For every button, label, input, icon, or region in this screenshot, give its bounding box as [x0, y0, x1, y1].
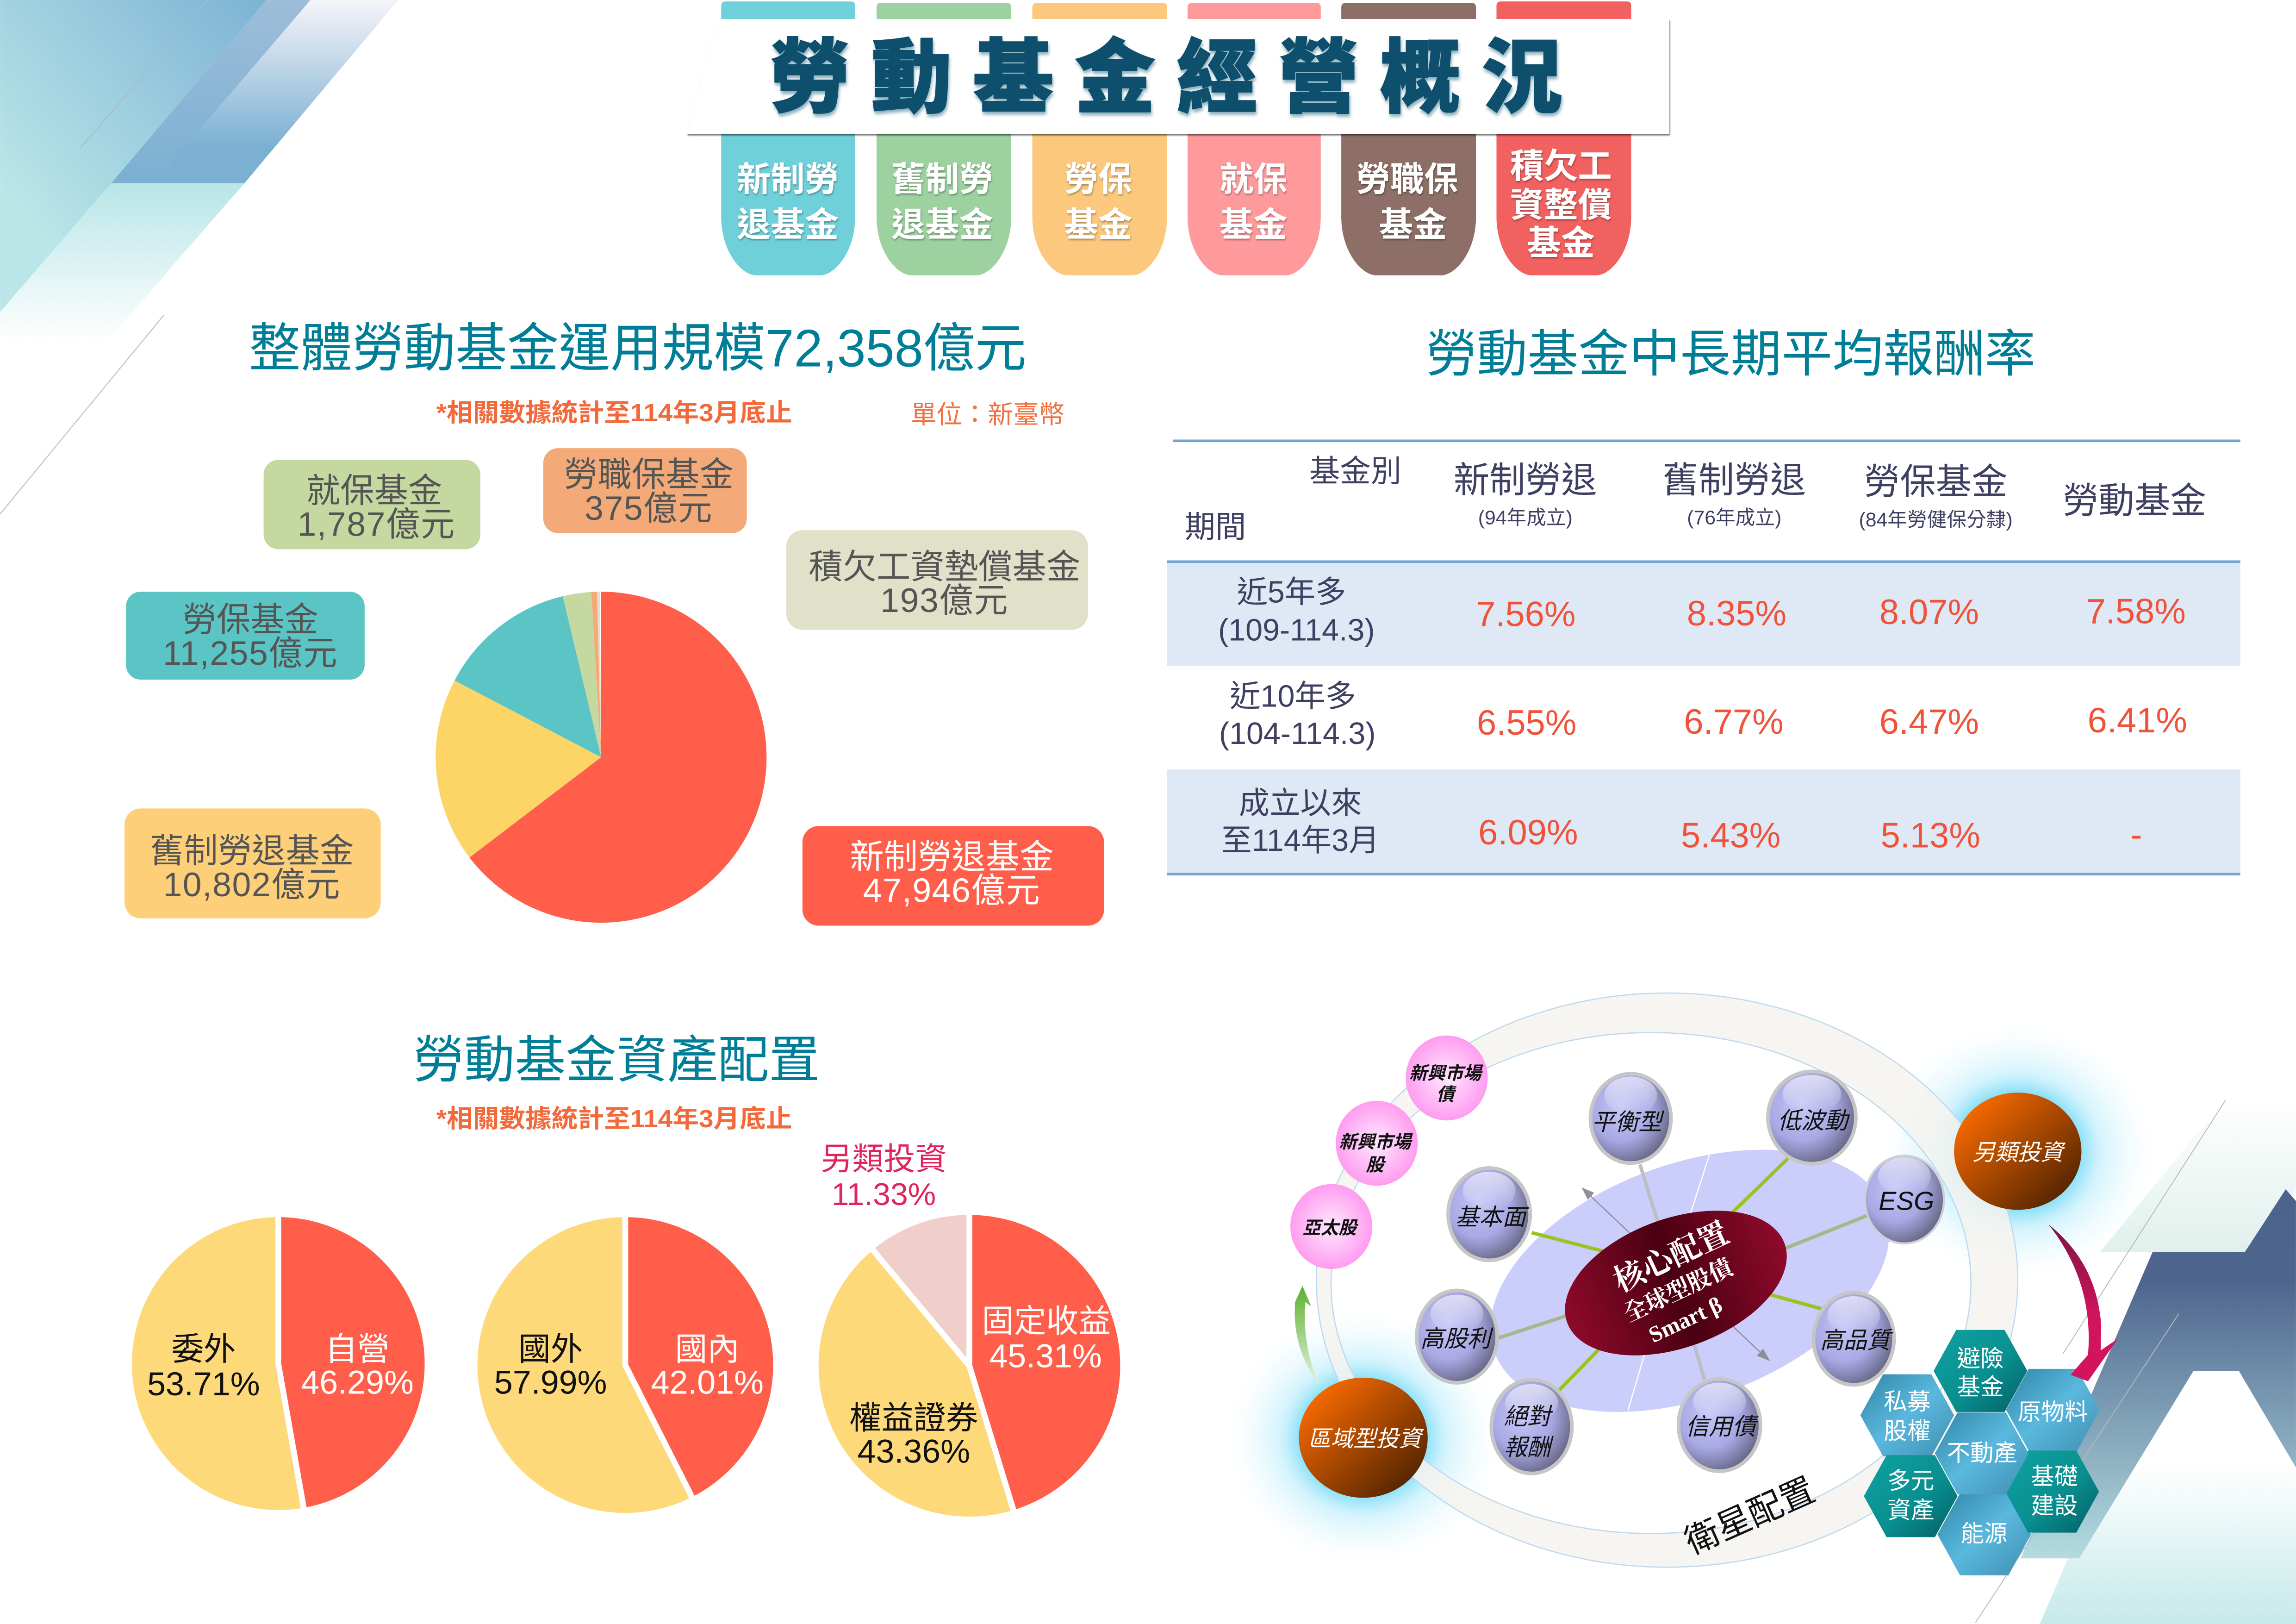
- fund tab: 新制勞退基金: [721, 132, 855, 275]
- hex: 原物料: 原物料: [2018, 1399, 2088, 1425]
- table row: 近10年多: (104-114.3): [1219, 717, 1375, 751]
- sphere: 信用債: 信用債: [1686, 1413, 1759, 1440]
- background: bottom-right corner geometry: [1975, 1099, 2296, 1624]
- hex: 能源: 能源: [1960, 1520, 2008, 1547]
- table row: 近10年多: [1219, 679, 2187, 751]
- note: currency unit: 單位：新臺幣: [911, 400, 1064, 429]
- table row: 近5年多: 8.35%: [1687, 594, 1786, 633]
- pie chart: 固定收益, 權益證券, 另類投資: 另類投資: [821, 1142, 946, 1177]
- hex: 多元資產: 多元: [1887, 1468, 1934, 1494]
- fund tab: 新制勞退基金: 退基金: [737, 206, 839, 244]
- callout: 舊制勞退基金: [124, 808, 381, 918]
- fund tab: 勞職保基金: 勞職保: [1356, 161, 1458, 199]
- hex: 避險基金: 避險: [1957, 1345, 2004, 1372]
- sphere: 絕對報酬: 報酬: [1504, 1434, 1554, 1460]
- pie chart: 國外 vs 國內: 42.01%: [651, 1364, 764, 1401]
- spokes: [1496, 1155, 1867, 1411]
- callout: 新制勞退基金: 新制勞退基金: [850, 838, 1054, 876]
- table row: 近5年多: [1218, 575, 2186, 648]
- satellite ring: [1316, 993, 2018, 1567]
- arrow: green upward: [1293, 1286, 1319, 1386]
- fund tab: 舊制勞退基金: 退基金: [891, 206, 993, 244]
- callout: 就保基金: 1,787億元: [297, 506, 455, 543]
- pie chart: 委外 vs 自營: 自營: [325, 1331, 390, 1367]
- pink bubble: 新興市場股: 新興市場: [1339, 1132, 1413, 1152]
- pie chart: 委外 vs 自營: [132, 1214, 425, 1513]
- core disk: [1454, 1099, 1925, 1462]
- sphere: 基本面: 基本面: [1456, 1204, 1529, 1230]
- fund tab: 勞職保基金: [1341, 132, 1476, 275]
- pink bubble: 新興市場股: 股: [1366, 1155, 1386, 1175]
- note: asset allocation data date: *相關數據統計至114年3月底止: [436, 1105, 792, 1133]
- pie chart: 固定收益, 權益證券, 另類投資: 11.33%: [832, 1177, 936, 1212]
- table row: 成立以來: -: [2130, 815, 2142, 855]
- pink bubble: 亞太股: 亞太股: [1302, 1218, 1358, 1238]
- callout: 勞保基金: [126, 592, 365, 680]
- pie chart: 國外 vs 國內: 國內: [675, 1331, 740, 1367]
- callout: 勞保基金: 11,255億元: [163, 634, 338, 672]
- callout: 積欠工資墊償基金: 積欠工資墊償基金: [809, 548, 1080, 586]
- thin arrows: [1583, 1188, 1769, 1360]
- diagram: core-satellite allocation: [1229, 993, 2153, 1575]
- glow: behind 區域型投資: [1229, 1312, 1498, 1564]
- orange sphere: 區域型投資: [1299, 1378, 1428, 1498]
- table header: 勞保基金: [1864, 462, 2008, 502]
- callout: 新制勞退基金: 47,946億元: [863, 872, 1040, 910]
- title banner: [687, 1, 1669, 275]
- callout: 積欠工資墊償基金: 193億元: [880, 581, 1008, 619]
- table row: 近5年多: 近5年多: [1237, 575, 1346, 610]
- table row: 近10年多: 6.47%: [1879, 702, 1979, 742]
- hex: 私募股權: 私募: [1884, 1388, 1931, 1415]
- pie chart: 國外 vs 國內: [477, 1214, 773, 1513]
- table row: 成立以來: [1221, 786, 2142, 858]
- main title: 勞動基金經營概況: [770, 32, 1562, 123]
- sphere: 高品質: [1813, 1293, 1894, 1385]
- fund tab: 就保基金: [1188, 132, 1321, 275]
- callout: 勞保基金: 勞保基金: [182, 600, 318, 638]
- pie chart: total fund size: [518, 675, 684, 840]
- table header: 新制勞退: [1454, 461, 1597, 500]
- callout: 勞職保基金: 勞職保基金: [564, 456, 734, 493]
- pink bubble: 新興市場債: 債: [1436, 1085, 1456, 1105]
- arrow: magenta curved down: [2048, 1224, 2118, 1381]
- background: top-left corner geometry: [0, 0, 398, 514]
- table header: 勞動基金: [2063, 481, 2206, 521]
- sphere: 平衡型: 平衡型: [1592, 1109, 1664, 1135]
- hex: 基礎建設: 基礎: [2031, 1463, 2078, 1490]
- pink bubble: 新興市場債: [1406, 1036, 1487, 1120]
- sphere: 高股利: [1417, 1291, 1497, 1383]
- label: 衛星配置: 衛星配置: [1679, 1470, 1821, 1562]
- table row: 成立以來: 5.13%: [1881, 816, 1980, 855]
- core ellipse: [1545, 1183, 1807, 1383]
- table header: 期間: [1185, 510, 1246, 544]
- fund tab: 勞保基金: [1033, 132, 1167, 275]
- sphere: 高股利: 高股利: [1420, 1325, 1493, 1352]
- callout: 勞職保基金: [543, 448, 747, 533]
- heading: long-term average return: 勞動基金中長期平均報酬率: [1426, 326, 2035, 383]
- sphere: 低波動: [1768, 1071, 1856, 1164]
- core ellipse: 核心配置: [1609, 1216, 1734, 1299]
- sphere: 平衡型: [1591, 1074, 1671, 1163]
- orange sphere: 另類投資: [1954, 1093, 2081, 1210]
- table header: 基金別: [1309, 455, 1401, 489]
- hexagon cluster: alternative assets: [1860, 1330, 2100, 1575]
- hex: 私募股權: [1860, 1374, 1954, 1456]
- heading: total fund size: 整體勞動基金運用規模72,358億元: [249, 319, 1027, 378]
- pie chart: 委外 vs 自營: 46.29%: [301, 1364, 414, 1401]
- note: data date: *相關數據統計至114年3月底止: [436, 399, 792, 427]
- pie chart: 國外 vs 國內: 57.99%: [494, 1364, 607, 1401]
- core ellipse: 全球型股債: [1619, 1253, 1739, 1327]
- sphere: ESG: ESG: [1879, 1186, 1934, 1216]
- pie chart: 固定收益, 權益證券, 另類投資: 45.31%: [989, 1338, 1102, 1375]
- table row: 成立以來: 5.43%: [1681, 816, 1780, 855]
- table row: 近5年多: (109-114.3): [1218, 613, 1375, 648]
- table row: 成立以來: 6.09%: [1478, 813, 1578, 852]
- hex: 避險基金: 基金: [1957, 1374, 2004, 1400]
- hex: 避險基金: [1934, 1330, 2027, 1412]
- table header: [1185, 455, 2206, 544]
- hex: 基礎建設: 建設: [2031, 1493, 2078, 1519]
- pie chart: 固定收益, 權益證券, 另類投資: 43.36%: [858, 1433, 970, 1470]
- table header: (84年勞健保分隸): [1859, 509, 2013, 531]
- callout: 舊制勞退基金: 10,802億元: [163, 866, 341, 904]
- fund tab: 積欠工資墊償基金: [1496, 132, 1631, 275]
- callout: 舊制勞退基金: 舊制勞退基金: [150, 832, 354, 870]
- orange sphere: 另類投資: 另類投資: [1972, 1140, 2066, 1165]
- fund tab: 舊制勞退基金: [877, 132, 1011, 275]
- glow: behind 另類投資: [1883, 1025, 2153, 1277]
- sphere: 基本面: [1448, 1168, 1530, 1260]
- table row: 近5年多: 8.07%: [1879, 593, 1979, 632]
- table header: 舊制勞退: [1662, 461, 1806, 500]
- pink bubble: 亞太股: [1290, 1184, 1372, 1269]
- title plate: [687, 19, 1669, 134]
- pie chart: 國外 vs 國內: 國外: [518, 1331, 583, 1367]
- pie chart: 委外 vs 自營: 53.71%: [147, 1366, 260, 1403]
- hex: 多元資產: [1864, 1455, 1958, 1537]
- table: average return by fund and period: [1167, 441, 2240, 874]
- hex: 原物料: [2006, 1369, 2100, 1451]
- core ellipse: Smart β: [1645, 1292, 1726, 1348]
- table header: (94年成立): [1478, 506, 1573, 529]
- callout: 勞職保基金: 375億元: [585, 489, 713, 527]
- fund tab: 積欠工資墊償基金: 資整償: [1510, 186, 1612, 224]
- pie chart: 固定收益, 權益證券, 另類投資: 固定收益: [982, 1303, 1111, 1339]
- pie chart: 固定收益, 權益證券, 另類投資: [819, 1142, 1120, 1517]
- table row: 近10年多: 近10年多: [1230, 679, 1356, 713]
- fund tab: 新制勞退基金: 新制勞: [737, 161, 839, 199]
- hex: 多元資產: 資產: [1887, 1497, 1934, 1523]
- sphere: 信用債: [1679, 1379, 1761, 1471]
- fund tab: 積欠工資墊償基金: 積欠工: [1510, 147, 1612, 185]
- fund tab: 舊制勞退基金: 舊制勞: [891, 161, 993, 199]
- sphere: 絕對報酬: [1491, 1380, 1572, 1474]
- sphere: 絕對報酬: 絕對: [1504, 1403, 1553, 1430]
- sphere: ESG: [1865, 1156, 1944, 1243]
- callout: 新制勞退基金: [803, 826, 1104, 926]
- heading: asset allocation: 勞動基金資產配置: [413, 1032, 820, 1089]
- fund tab: 勞保基金: 基金: [1064, 206, 1132, 244]
- hex: 能源: [1937, 1493, 2031, 1575]
- table header: (76年成立): [1687, 506, 1781, 529]
- hex: 不動產: [1935, 1412, 2028, 1494]
- pink bubble: 新興市場股: [1336, 1101, 1418, 1186]
- orange sphere: 區域型投資: 區域型投資: [1308, 1426, 1424, 1451]
- hex: 私募股權: 股權: [1884, 1418, 1931, 1444]
- table row: 成立以來: 至114年3月: [1221, 824, 1380, 858]
- fund tab: 積欠工資墊償基金: 基金: [1527, 224, 1595, 262]
- table row: 成立以來: 成立以來: [1239, 786, 1362, 820]
- table row: 近10年多: 6.41%: [2088, 701, 2187, 740]
- sphere: 低波動: 低波動: [1778, 1107, 1850, 1134]
- hex: 不動產: 不動產: [1947, 1440, 2017, 1466]
- table row: 近10年多: 6.77%: [1684, 702, 1784, 742]
- pie chart: 固定收益, 權益證券, 另類投資: 權益證券: [849, 1400, 978, 1436]
- tabs: top stubs: [721, 1, 1631, 19]
- fund tab: 勞保基金: 勞保: [1064, 161, 1132, 199]
- callout: 就保基金: 就保基金: [306, 472, 442, 510]
- table row: 近10年多: 6.55%: [1477, 703, 1576, 743]
- callout: 積欠工資墊償基金: [786, 530, 1088, 630]
- sphere: 高品質: 高品質: [1820, 1327, 1893, 1353]
- hex: 基礎建設: [2005, 1450, 2099, 1533]
- pink bubble: 新興市場債: 新興市場: [1409, 1064, 1484, 1084]
- fund tab: 就保基金: 基金: [1220, 206, 1288, 244]
- fund tab: 勞職保基金: 基金: [1379, 206, 1447, 244]
- table row: 近5年多: 7.58%: [2086, 592, 2186, 631]
- callout: 就保基金: [264, 460, 480, 549]
- fund tab: 就保基金: 就保: [1220, 161, 1288, 199]
- pie chart: 委外 vs 自營: 委外: [171, 1331, 236, 1367]
- table row: 近5年多: 7.56%: [1476, 595, 1575, 634]
